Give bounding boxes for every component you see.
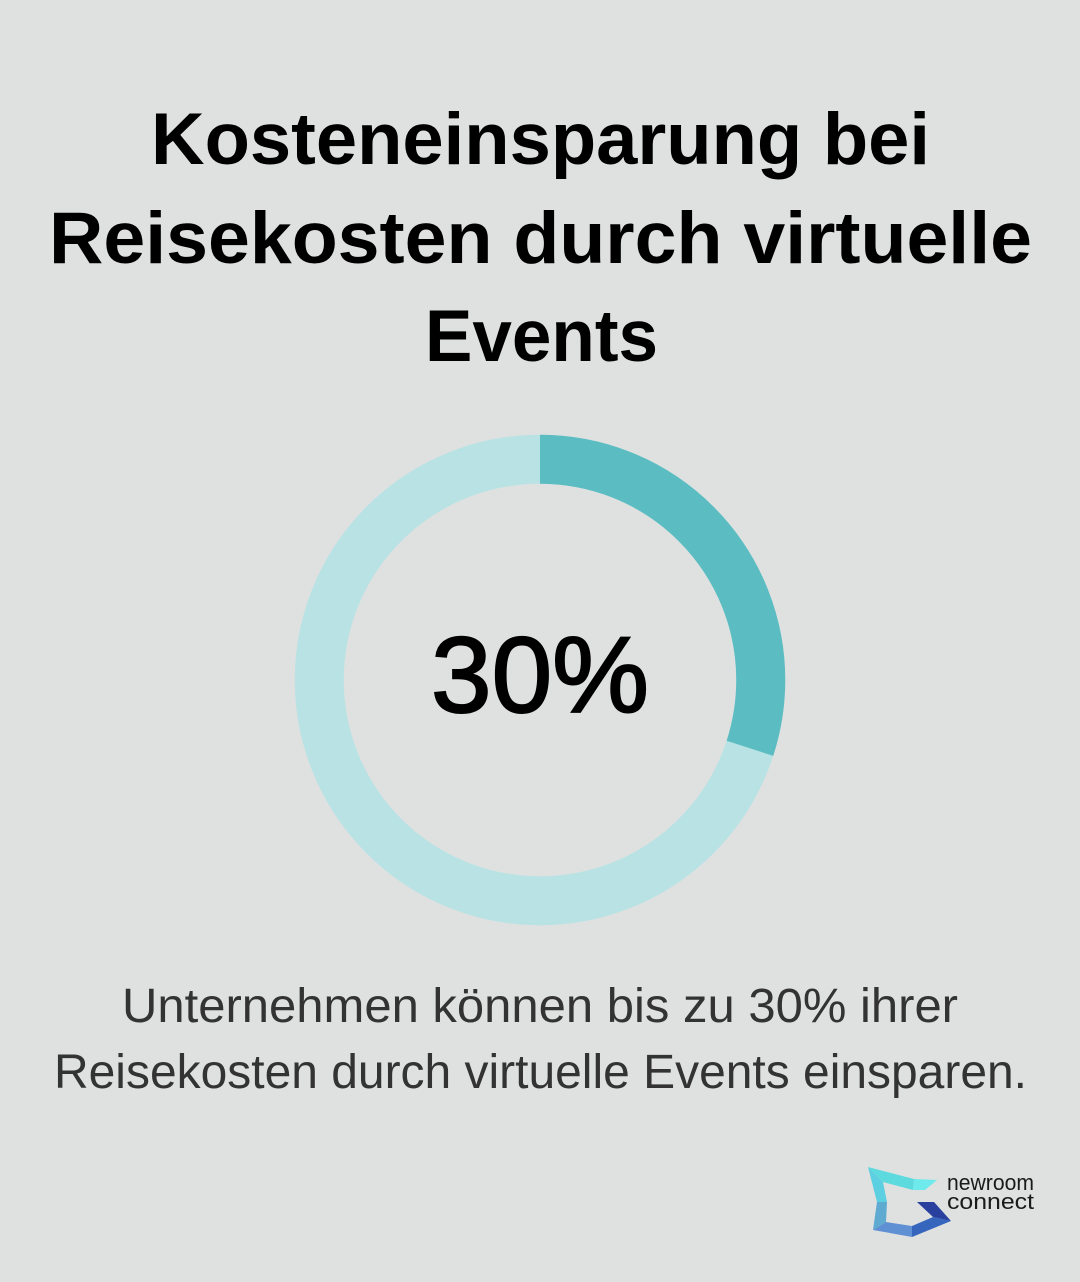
description text: Unternehmen können bis zu 30% ihrer: [122, 980, 958, 1033]
logo text: connect: [947, 1189, 1034, 1214]
logo text: [947, 1170, 1034, 1214]
center value: 30%: [431, 614, 649, 735]
title: Reisekosten durch virtuelle: [49, 198, 1032, 279]
logo text: newroom: [947, 1170, 1034, 1195]
logo: newroom connect: [868, 1167, 1034, 1237]
title: Kosteneinsparung bei: [151, 99, 930, 180]
description text: [54, 980, 1027, 1099]
title: Events: [425, 296, 658, 377]
donut chart: 30%: [319, 459, 761, 901]
title: [49, 99, 1032, 377]
description text: Reisekosten durch virtuelle Events einsparen.: [54, 1046, 1027, 1099]
icon: logo mark: [868, 1167, 951, 1237]
